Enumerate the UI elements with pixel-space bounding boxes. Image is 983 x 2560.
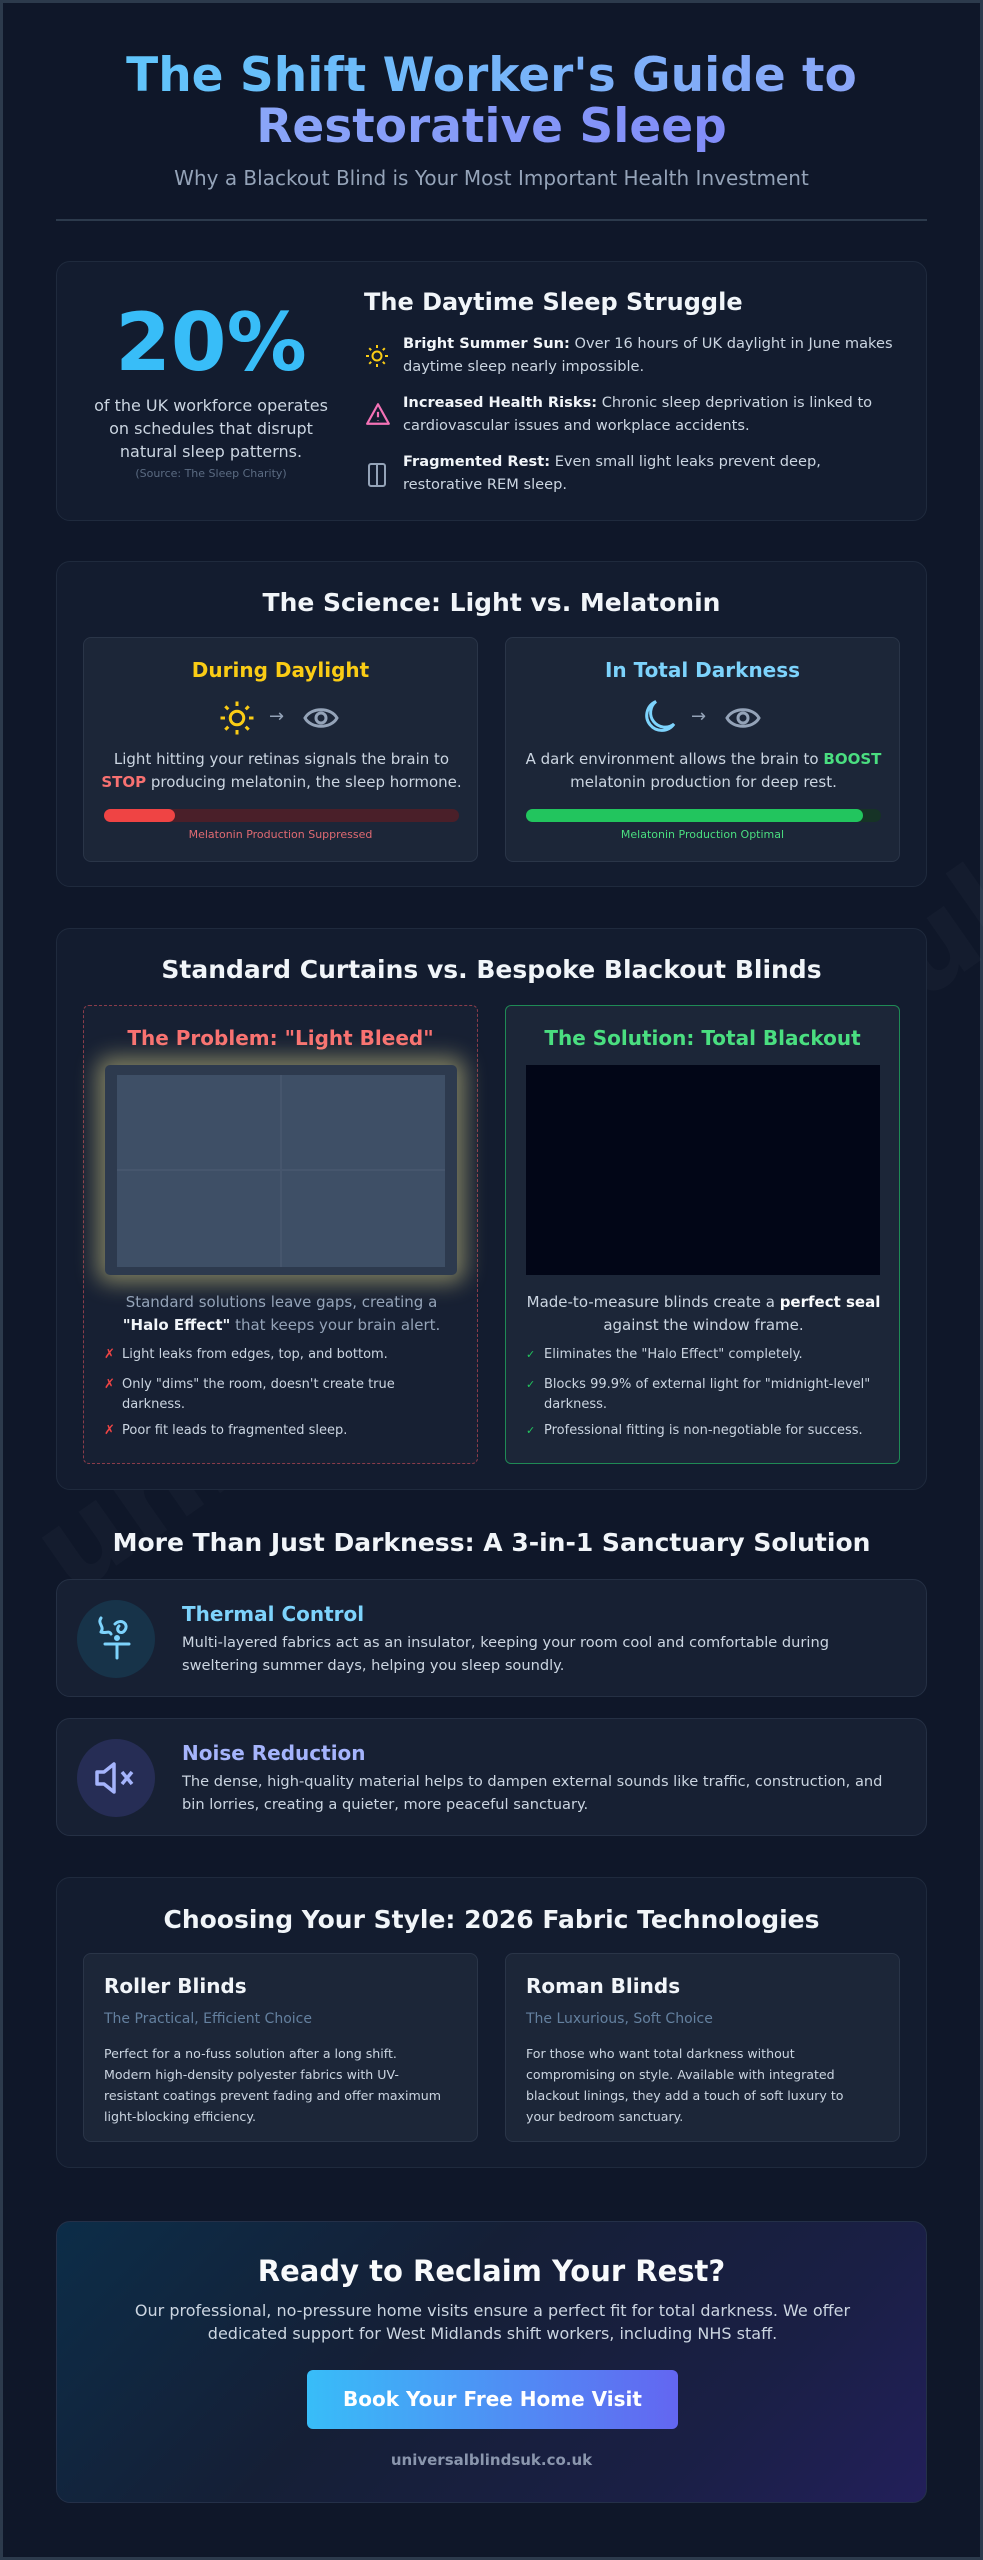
card: in total darkness xyxy=(505,637,900,862)
heading: daytime sleep struggle: The Daytime Sleep Struggle xyxy=(364,288,743,316)
bar: suppressed xyxy=(104,809,459,822)
card: solution: The Solution: Total Blackout xyxy=(544,1026,861,1050)
stat: 20%: of the UK workforce operates xyxy=(94,396,328,415)
card: roller blinds: Roller Blinds xyxy=(104,1974,247,1998)
list: benefits xyxy=(526,1347,870,1438)
card: during daylight xyxy=(83,637,478,862)
list: benefits: Professional fitting is non-negotiable for success. xyxy=(544,1423,863,1438)
stat: 20%: 20% xyxy=(115,296,307,389)
list: benefits: ✓ xyxy=(526,1424,535,1437)
title xyxy=(126,48,857,154)
blackout window xyxy=(526,1065,880,1275)
card: solution: Made-to-measure blinds create a perfect seal against the window frame. xyxy=(527,1293,880,1334)
heading: comparison: Standard Curtains vs. Bespoke Blackout Blinds xyxy=(161,955,822,984)
stat: 20%: on schedules that disrupt xyxy=(109,419,313,438)
title: Restorative Sleep xyxy=(256,99,727,154)
list: benefits: ✓ xyxy=(526,1378,535,1391)
icons: moon to eye: → xyxy=(691,706,706,727)
card: problem: The Problem: "Light Bleed" xyxy=(127,1026,434,1050)
panel: curtains vs blinds xyxy=(56,928,927,1490)
stat: 20%: (Source: The Sleep Charity) xyxy=(135,467,287,480)
list: problems xyxy=(104,1347,395,1438)
text: cta: Our professional, no-pressure home visits ensure a perfect fit for total darkness. We offer dedicated support for West Midlands shift workers, including NHS staff. xyxy=(135,2301,850,2343)
panel: science xyxy=(56,561,927,887)
title: The Shift Worker's Guide to xyxy=(126,48,857,103)
button xyxy=(307,2370,678,2429)
card: noise reduction: Noise Reduction xyxy=(182,1741,366,1765)
card: in total darkness: Melatonin Production Optimal xyxy=(621,828,784,841)
list: benefits: Blocks 99.9% of external light for "midnight-level" darkness. xyxy=(544,1377,870,1412)
card: thermal control xyxy=(56,1579,927,1697)
stat: 20% xyxy=(94,296,328,480)
item: bright summer sun: Bright Summer Sun: Over 16 hours of UK daylight in June makes daytime sleep nearly impossible. xyxy=(403,335,893,375)
bar: optimal xyxy=(526,809,881,822)
card: during daylight: Melatonin Production Suppressed xyxy=(189,828,372,841)
subtitle: Why a Blackout Blind is Your Most Important Health Investment xyxy=(174,166,809,190)
card: during daylight: During Daylight xyxy=(192,658,369,682)
card: roman blinds: Roman Blinds xyxy=(526,1974,680,1998)
icon: thermal xyxy=(77,1600,155,1678)
stat: 20%: natural sleep patterns. xyxy=(120,442,302,461)
icon: warning xyxy=(366,403,390,425)
window with halo xyxy=(105,1065,457,1275)
icon: window xyxy=(368,463,386,487)
card: roman blinds xyxy=(505,1953,900,2142)
card: roller blinds: Perfect for a no-fuss solution after a long shift. Modern high-density polyester fabrics with UV-resistant coatings prevent fading and offer maximum light-blocking efficiency. xyxy=(104,2046,441,2124)
button: Book Your Free Home Visit xyxy=(343,2387,642,2411)
list: benefits: ✓ xyxy=(526,1348,535,1361)
list: problems: Only "dims" the room, doesn't create true darkness. xyxy=(122,1377,395,1412)
card: roman blinds: The Luxurious, Soft Choice xyxy=(526,2011,713,2027)
item: health risks: Increased Health Risks: Chronic sleep deprivation is linked to cardiovascular issues and workplace accidents. xyxy=(403,394,872,434)
icons: sun to eye: → xyxy=(269,706,284,727)
heading: science: The Science: Light vs. Melatonin xyxy=(263,588,720,617)
icon: sun xyxy=(366,345,388,367)
panel: daytime sleep struggle xyxy=(56,261,927,521)
list: problems: Light leaks from edges, top, and bottom. xyxy=(122,1347,388,1362)
card: thermal control: Multi-layered fabrics act as an insulator, keeping your room cool and comfortable during sweltering summer days, helping you sleep soundly. xyxy=(182,1634,829,1674)
card: problem xyxy=(83,1005,478,1464)
heading: 3-in-1: More Than Just Darkness: A 3-in-1 Sanctuary Solution xyxy=(113,1528,870,1557)
list: problems: ✗ xyxy=(104,1347,115,1362)
icons: sun to eye xyxy=(220,702,339,734)
card: noise reduction: The dense, high-quality material helps to dampen external sounds like traffic, construction, and bin lorries, creating a quieter, more peaceful sanctuary. xyxy=(182,1773,882,1813)
item: fragmented rest: Fragmented Rest: Even small light leaks prevent deep, restorative REM sleep. xyxy=(403,453,821,493)
card: in total darkness: In Total Darkness xyxy=(605,658,800,682)
heading: ready: Ready to Reclaim Your Rest? xyxy=(258,2254,725,2288)
url: universalblindsuk.co.uk xyxy=(391,2451,592,2469)
card: solution xyxy=(505,1005,900,1464)
heading: choosing style: Choosing Your Style: 2026 Fabric Technologies xyxy=(163,1905,820,1934)
card: during daylight: Light hitting your retinas signals the brain to STOP producing melatonin, the sleep hormone. xyxy=(101,750,462,791)
card: roller blinds: The Practical, Efficient Choice xyxy=(104,2011,312,2027)
list: problems: Poor fit leads to fragmented sleep. xyxy=(122,1423,347,1438)
panel: choosing style xyxy=(56,1877,927,2168)
list: problems: ✗ xyxy=(104,1377,115,1392)
card: noise reduction xyxy=(56,1718,927,1836)
card: roman blinds: For those who want total darkness without compromising on style. Available with integrated blackout linings, they add a touch of soft luxury to your bedroom sanctuary. xyxy=(526,2046,843,2124)
list: benefits: Eliminates the "Halo Effect" completely. xyxy=(544,1347,803,1362)
icon: mute xyxy=(77,1739,155,1817)
icons: moon to eye xyxy=(645,700,761,732)
list: problems: ✗ xyxy=(104,1423,115,1438)
card: roller blinds xyxy=(83,1953,478,2142)
panel: call to action xyxy=(56,2221,927,2503)
card: thermal control: Thermal Control xyxy=(182,1602,364,1626)
card: in total darkness: A dark environment allows the brain to BOOST melatonin production for deep rest. xyxy=(526,750,881,791)
card: problem: Standard solutions leave gaps, creating a "Halo Effect" that keeps your brain alert. xyxy=(123,1293,440,1334)
